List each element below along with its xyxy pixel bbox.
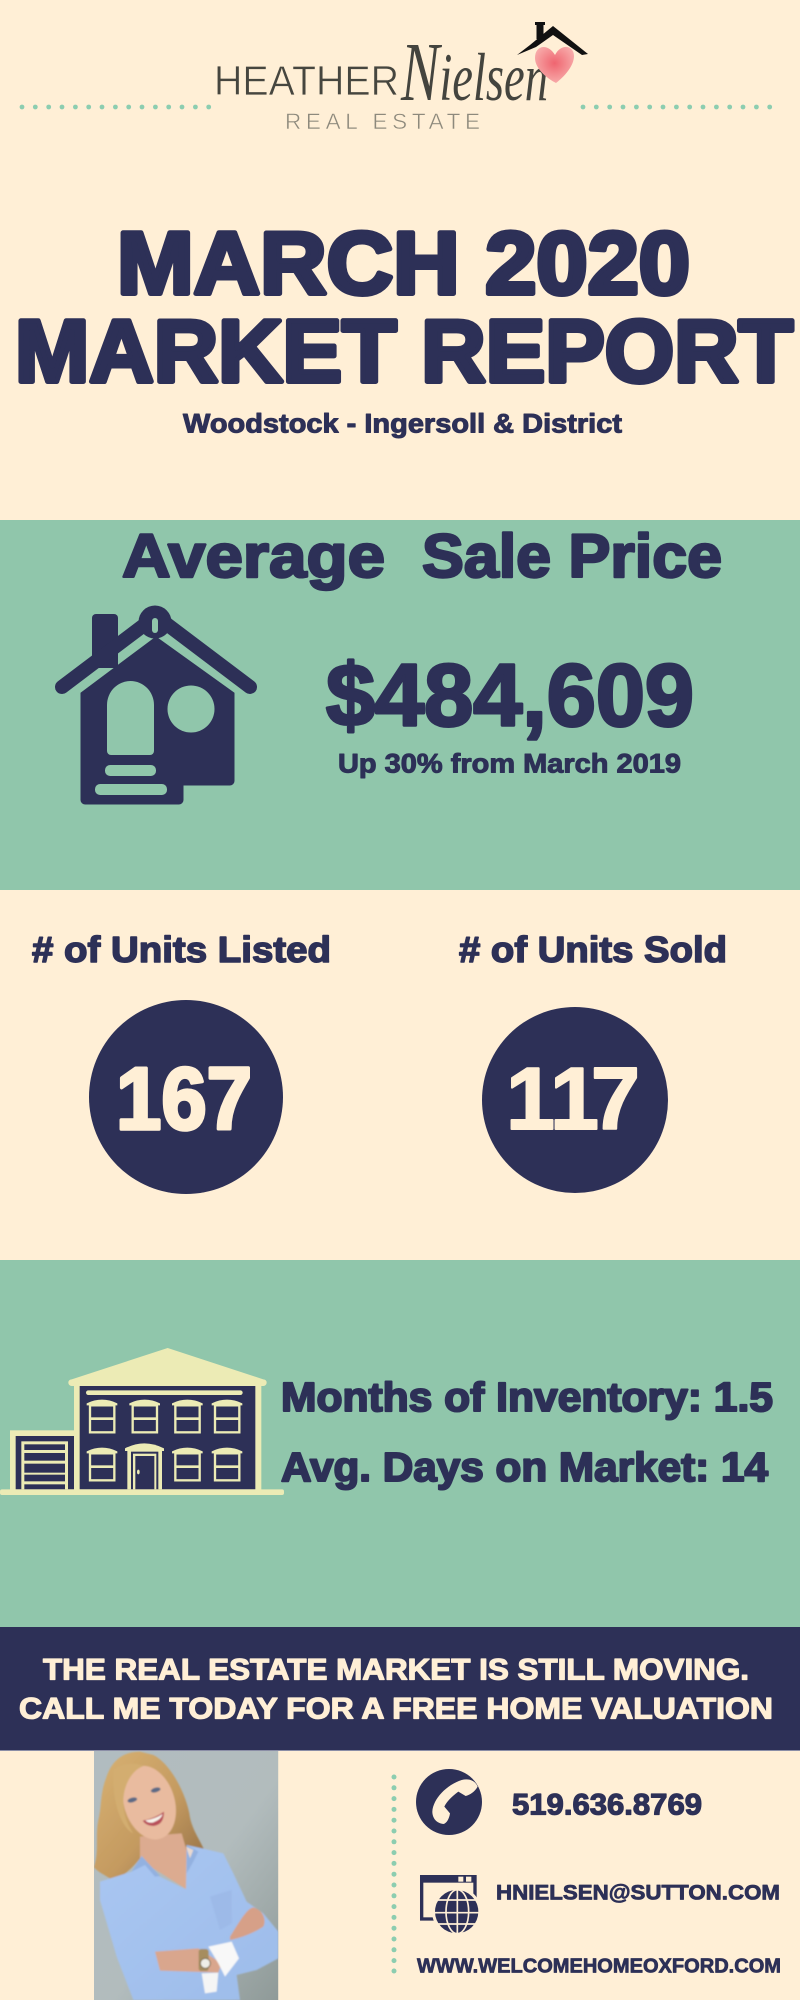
stat: 117: 117 (506, 1049, 640, 1148)
photo: agent portrait (94, 1751, 278, 2000)
email address: HNIELSEN@SUTTON.COM (496, 1882, 780, 1904)
stat: average days on market: Avg. Days on Market: 14 (281, 1444, 768, 1490)
banner line 1: THE REAL ESTATE MARKET IS STILL MOVING. (43, 1654, 749, 1686)
heading: average sale price: Average (122, 522, 385, 590)
logo script: Nielsen: Nielsen (400, 26, 548, 119)
stat: 167: 167 (116, 1049, 252, 1148)
dotted divider left (20, 105, 211, 109)
banner background (0, 1627, 800, 1750)
logo icon: roof and heart (517, 22, 588, 83)
panel: units sold (459, 929, 727, 1193)
panel: units listed (32, 929, 331, 1194)
dotted divider right (581, 105, 772, 109)
subtitle: Woodstock - Ingersoll & District (183, 408, 622, 438)
stat: average price: $484,609 (326, 646, 694, 744)
panel background (0, 520, 800, 890)
panel: contact details (416, 1769, 781, 1978)
title (15, 214, 793, 400)
label: units sold: # of Units Sold (459, 929, 727, 970)
banner: call to action (0, 1627, 800, 1750)
title line 1: MARCH 2020 (117, 214, 690, 312)
website address: WWW.WELCOMEHOMEOXFORD.COM (417, 1954, 781, 1978)
stat: months of inventory: Months of Inventory: 1.5 (281, 1374, 773, 1420)
logo wordmark: Heather: HEATHER (214, 57, 399, 104)
panel: average sale price (0, 520, 800, 890)
label: units listed: # of Units Listed (32, 929, 331, 970)
icon: browser and globe (420, 1875, 481, 1936)
icon: building (0, 1348, 284, 1495)
panel: inventory and days on market (0, 1260, 800, 1627)
heading: average sale price (122, 522, 722, 590)
icon: house (62, 606, 250, 804)
icon: phone (416, 1769, 482, 1835)
banner line 2: CALL ME TODAY FOR A FREE HOME VALUATION (19, 1692, 773, 1726)
hair (94, 1752, 204, 1882)
panel background (0, 1260, 800, 1627)
logo subtitle: REAL ESTATE (285, 109, 480, 134)
circle: units listed (89, 1000, 283, 1194)
phone number: 519.636.8769 (512, 1788, 702, 1822)
logo: Heather Nielsen Real Estate (214, 22, 588, 134)
stat note: year over year: Up 30% from March 2019 (338, 748, 681, 778)
circle: units sold (482, 1007, 668, 1193)
title line 2: MARKET REPORT (15, 302, 793, 400)
heading: average sale price: Sale Price (422, 522, 722, 590)
dotted divider: contact (392, 1774, 396, 1974)
